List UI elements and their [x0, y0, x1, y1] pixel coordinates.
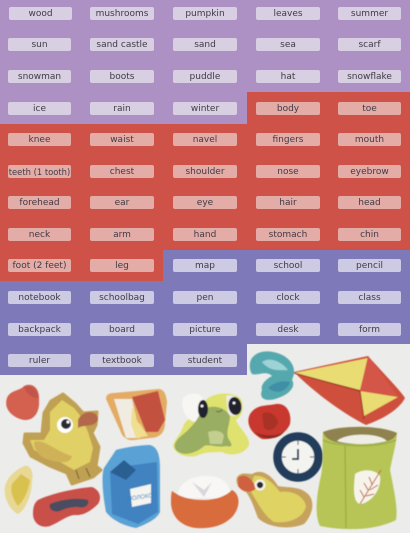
word labels: leg — [115, 261, 129, 271]
word labels: stomach — [269, 230, 307, 240]
icon: orange bowl with white cloth — [171, 476, 239, 528]
word labels: summer — [351, 9, 388, 19]
icon: green sack of flour — [317, 427, 397, 529]
word labels: eye — [197, 198, 213, 208]
word labels: forehead — [19, 198, 60, 208]
word labels: snowflake — [347, 72, 392, 82]
word labels: hand — [194, 230, 216, 240]
word labels: ice — [33, 104, 46, 114]
word labels: sand — [194, 40, 216, 50]
word labels: foot (2 feet) — [13, 261, 66, 271]
word labels: neck — [29, 230, 50, 240]
icon: yellow duck — [24, 394, 101, 484]
word labels: waist — [110, 135, 134, 145]
word labels: chin — [360, 230, 379, 240]
word labels: sea — [280, 40, 296, 50]
word labels: form — [359, 325, 380, 335]
word labels: boots — [110, 72, 134, 82]
word labels: fingers — [272, 135, 304, 145]
word labels: pumpkin — [185, 9, 225, 19]
icon: yellow lemon slice — [5, 466, 33, 514]
word labels: mouth — [355, 135, 384, 145]
word labels: head — [358, 198, 381, 208]
icon: wall clock — [278, 436, 318, 478]
word labels: notebook — [18, 293, 61, 303]
word labels: snowman — [18, 72, 61, 82]
word labels: ruler — [29, 356, 50, 366]
word labels: sun — [31, 40, 48, 50]
icon: kite — [294, 356, 405, 425]
word labels: navel — [193, 135, 217, 145]
word labels: nose — [277, 167, 299, 177]
icon: red rose — [248, 404, 290, 439]
word labels: mushrooms — [96, 9, 148, 19]
word labels: school — [274, 261, 302, 271]
word labels: clock — [276, 293, 300, 303]
word labels: desk — [277, 325, 299, 335]
word labels: board — [109, 325, 135, 335]
word labels: student — [188, 356, 222, 366]
word labels — [8, 7, 401, 367]
word labels: arm — [113, 230, 131, 240]
word labels: scarf — [358, 40, 381, 50]
word labels: wood — [28, 9, 53, 19]
word labels: pencil — [356, 261, 383, 271]
word labels: picture — [189, 325, 221, 335]
icon: milk carton: МОЛОКО — [127, 493, 154, 503]
word labels: sand castle — [96, 40, 148, 50]
word labels: puddle — [190, 72, 220, 82]
word labels: leaves — [273, 9, 303, 19]
word labels: teeth (1 tooth) — [9, 167, 70, 177]
word labels: eyebrow — [350, 167, 389, 177]
word labels: map — [195, 261, 215, 271]
word labels: backpack — [18, 325, 61, 335]
icon: orange and red block — [106, 389, 167, 440]
word labels: body — [277, 104, 299, 114]
word labels: textbook — [102, 356, 142, 366]
word labels: hair — [279, 198, 297, 208]
word labels: ear — [115, 198, 129, 208]
icon: red goggles — [33, 487, 100, 527]
word labels: chest — [110, 167, 134, 177]
word labels: class — [358, 293, 381, 303]
icon: small duck — [236, 472, 312, 527]
panel: nature words background — [0, 0, 410, 125]
icon: teal ribbon — [250, 351, 294, 400]
word labels: shoulder — [185, 167, 225, 177]
word labels: toe — [362, 104, 377, 114]
icon: tomato blob — [6, 385, 39, 420]
icon: green frog — [173, 393, 249, 457]
icon: milk carton — [103, 445, 160, 528]
word labels: winter — [191, 104, 219, 114]
word labels: knee — [28, 135, 50, 145]
word labels: pen — [197, 293, 213, 303]
word labels: rain — [113, 104, 131, 114]
word labels: hat — [281, 72, 295, 82]
word labels: schoolbag — [99, 293, 145, 303]
